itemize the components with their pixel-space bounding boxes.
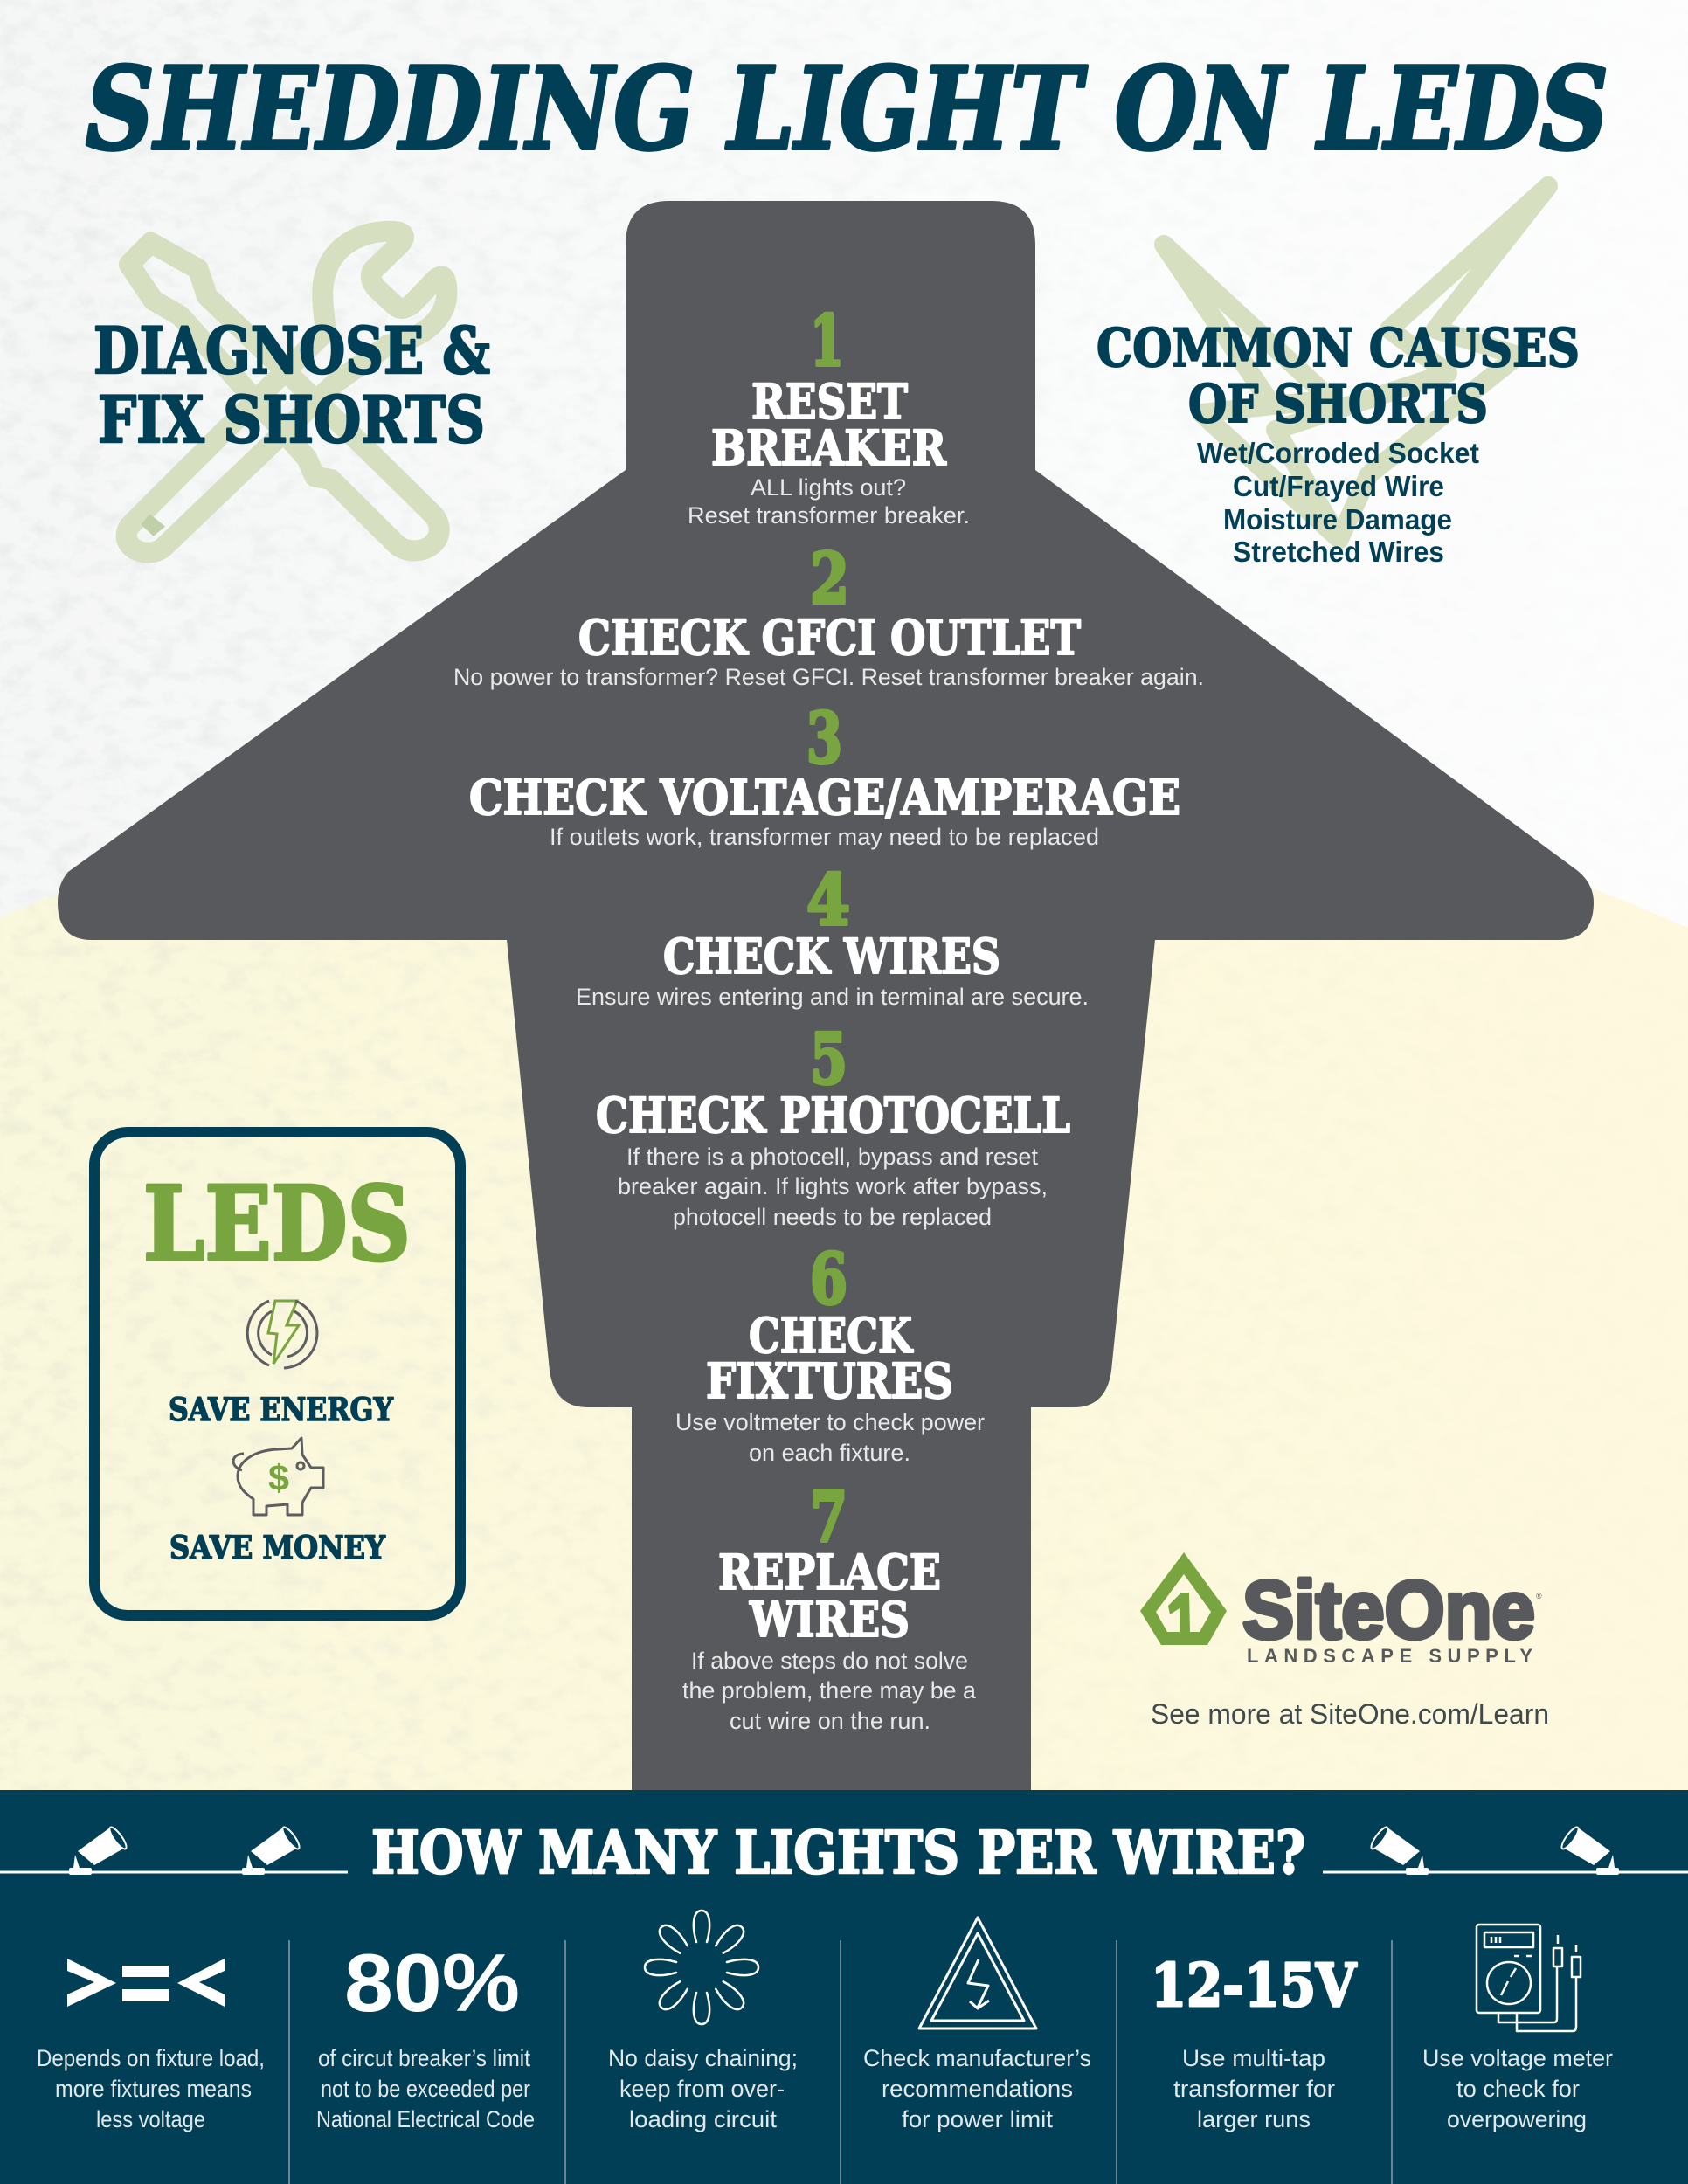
step 7: WIRES <box>749 1591 910 1648</box>
text: multi-tap: Use multi-tap <box>1182 2045 1325 2071</box>
logo tagline: LANDSCAPE SUPPLY <box>1247 1645 1532 1667</box>
list: causes of shorts: Wet/Corroded Socket <box>1197 437 1479 469</box>
text: multi-tap: larger runs <box>1197 2106 1311 2132</box>
step 7: the problem, there may be a <box>682 1677 977 1704</box>
column 5: multi-tap transformer <box>1151 1951 1357 2132</box>
step 2 <box>453 537 1204 690</box>
icon: piggy bank <box>233 1438 323 1515</box>
step 2: CHECK GFCI OUTLET <box>578 609 1081 666</box>
text: voltage meter: to check for <box>1456 2076 1580 2102</box>
heading: common causes of shorts <box>1097 318 1580 435</box>
text: daisy chaining: No daisy chaining; <box>608 2045 798 2071</box>
icon: piggy bank: $ <box>268 1457 289 1498</box>
step 5: photocell needs to be replaced <box>673 1204 992 1230</box>
step 6: 6 <box>810 1238 847 1320</box>
text: fixture load: more fixtures means <box>55 2076 252 2102</box>
text: multi-tap <box>1173 2045 1335 2132</box>
panel: how many lights per wire <box>0 1790 1688 2184</box>
text: daisy chaining <box>608 2045 798 2132</box>
icon: energy bolt <box>247 1301 317 1368</box>
text: breaker limit <box>316 2045 535 2132</box>
panel: LEDs benefits <box>94 1132 460 1615</box>
background: mottled texture overlay <box>0 3 593 1790</box>
step 1: BREAKER <box>711 419 947 476</box>
text: manufacturer recommendations: for power limit <box>902 2106 1054 2132</box>
step 5: breaker again. If lights work after bypass, <box>618 1173 1048 1199</box>
heading: LEDS: LEDS <box>143 1164 411 1284</box>
text: daisy chaining: keep from over- <box>619 2076 785 2102</box>
logo wordmark: SiteOne <box>1242 1564 1535 1655</box>
logo: SiteOne <box>1140 1552 1542 1667</box>
text: breaker limit: National Electrical Code <box>316 2106 535 2132</box>
step 1: RESET <box>751 373 908 430</box>
icon: spot light 4 <box>1560 1825 1619 1875</box>
step 6: on each fixture. <box>749 1440 910 1466</box>
text: daisy chaining: loading circuit <box>629 2106 778 2132</box>
step 4 <box>576 859 1089 1010</box>
text: voltage meter: Use voltage meter <box>1422 2045 1613 2071</box>
icon: daisy flower <box>645 1911 758 2024</box>
label: save energy: SAVE ENERGY <box>169 1392 394 1428</box>
text: manufacturer recommendations <box>863 2045 1091 2132</box>
list: causes of shorts <box>1197 437 1479 568</box>
text: voltage meter: overpowering <box>1447 2106 1587 2132</box>
step 6: FIXTURES <box>706 1352 953 1409</box>
column 1: fixture load <box>37 1959 265 2132</box>
step 7: REPLACE <box>718 1544 941 1600</box>
text: breaker limit: of circut breaker’s limit <box>318 2045 530 2071</box>
wire right <box>1323 1871 1688 1873</box>
step 4: Ensure wires entering and in terminal are secure. <box>576 984 1089 1010</box>
column 3: no daisy chaining <box>608 1911 798 2132</box>
icon: spot light 1 <box>69 1825 128 1875</box>
step 3: 3 <box>806 697 842 779</box>
list: causes of shorts: Moisture Damage <box>1223 503 1452 536</box>
step 5: CHECK PHOTOCELL <box>596 1087 1070 1144</box>
step 5: 5 <box>810 1018 847 1100</box>
icon: voltage meter <box>1477 1925 1581 2031</box>
heading: common causes of shorts: COMMON CAUSES <box>1097 318 1580 379</box>
logo mark <box>1140 1552 1227 1645</box>
icon: warning triangle <box>919 1918 1036 2028</box>
text: fixture load: less voltage <box>96 2106 205 2132</box>
step 2: 2 <box>810 537 849 619</box>
website link text: See more at SiteOne.com/Learn <box>1151 1698 1549 1730</box>
panel border <box>94 1132 460 1615</box>
icon: lightning bolts <box>1164 186 1548 539</box>
step 5: If there is a photocell, bypass and reset <box>626 1144 1038 1170</box>
text: breaker limit: not to be exceeded per <box>321 2076 530 2102</box>
step 4: CHECK WIRES <box>663 928 1000 985</box>
step 7: 7 <box>810 1476 847 1558</box>
step 4: 4 <box>806 859 850 941</box>
step 1 <box>688 300 970 529</box>
heading: how many lights per wire: HOW MANY LIGHTS PER WIRE? <box>371 1818 1305 1887</box>
step 6 <box>675 1238 985 1466</box>
wire left <box>0 1871 348 1873</box>
text: fixture load <box>37 2045 265 2132</box>
step 1: 1 <box>810 300 844 382</box>
background: cream hill <box>0 741 1688 1800</box>
step 2: No power to transformer? Reset GFCI. Reset transformer breaker again. <box>453 664 1204 690</box>
step 3: If outlets work, transformer may need to be replaced <box>550 824 1099 850</box>
stat: 80%: 80% <box>344 1937 520 2028</box>
icon: spot light 2 <box>242 1825 301 1875</box>
column 2: 80 percent <box>316 1937 535 2132</box>
logo: SiteOne: ® <box>1536 1592 1542 1600</box>
step 6: CHECK <box>749 1307 914 1364</box>
column 6: voltage meter <box>1422 1925 1613 2132</box>
icon: greater equal less symbols <box>67 1959 225 2007</box>
step 3 <box>469 697 1180 850</box>
step 7: If above steps do not solve <box>691 1648 968 1674</box>
step 5 <box>596 1018 1070 1230</box>
stat: 12-15V: 12-15V <box>1151 1951 1357 2020</box>
step 7: cut wire on the run. <box>730 1708 930 1734</box>
text: multi-tap: transformer for <box>1173 2076 1335 2102</box>
step 3: CHECK VOLTAGE/AMPERAGE <box>469 769 1180 826</box>
step 1: ALL lights out? <box>751 474 906 501</box>
list: causes of shorts: Cut/Frayed Wire <box>1233 470 1444 502</box>
text: voltage meter <box>1422 2045 1613 2132</box>
column 4: manufacturer power limit <box>863 1918 1091 2132</box>
step 7 <box>682 1476 977 1734</box>
icon: spot light 3 <box>1369 1825 1429 1875</box>
panel background <box>0 1790 1688 2184</box>
list: causes of shorts: Stretched Wires <box>1233 536 1444 568</box>
text: manufacturer recommendations: recommendations <box>882 2076 1073 2102</box>
text: manufacturer recommendations: Check manufacturer’s <box>863 2045 1091 2071</box>
label: save money: SAVE MONEY <box>169 1530 386 1566</box>
big arrow shape <box>58 201 1594 1791</box>
icon: wrench and screwdriver <box>127 232 446 553</box>
step 6: Use voltmeter to check power <box>675 1409 985 1435</box>
step 1: Reset transformer breaker. <box>688 502 970 529</box>
heading: common causes of shorts: OF SHORTS <box>1188 374 1488 435</box>
heading: diagnose and fix shorts: FIX SHORTS <box>98 383 485 458</box>
heading: diagnose and fix shorts <box>93 314 490 458</box>
text: fixture load: Depends on fixture load, <box>37 2045 265 2071</box>
heading: diagnose and fix shorts: DIAGNOSE & <box>93 314 490 389</box>
